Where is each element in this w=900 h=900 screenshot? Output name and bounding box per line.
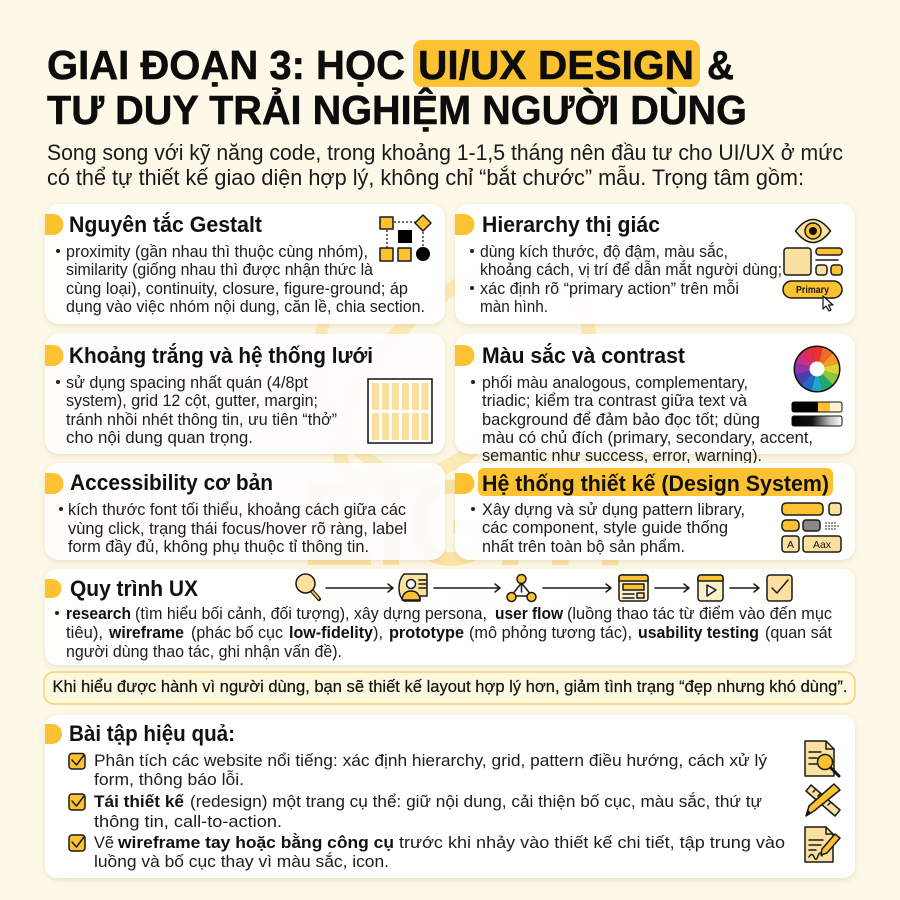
exercise 3: wireframe tay hoặc bằng công cụ (117, 833, 394, 852)
icon: colour wheel and contrast bars (792, 346, 842, 426)
icon: component library (782, 503, 841, 552)
exercise 3 (69, 833, 785, 871)
icon: ruler and pencil (806, 784, 840, 816)
icon: component library: A (787, 539, 794, 551)
body text: dụng vào việc nhóm nội dung, căn lề, chia section. (66, 298, 425, 316)
panel: Khoảng trắng và hệ thống lưới (45, 334, 445, 454)
watermark logo: EIGHT (300, 455, 645, 591)
subtitle: có thể tự thiết kế giao diện hợp lý, không chỉ “bắt chước” mẫu. Trọng tâm gồm: (47, 165, 804, 190)
body text: triadic; kiểm tra contrast giữa text và (482, 392, 748, 410)
body text: tránh nhồi nhét thông tin, ưu tiên “thở” (66, 411, 337, 429)
heading: Hierarchy thị giác (482, 212, 660, 237)
subtitle: Song song với kỹ năng code, trong khoảng 1-1,5 tháng nên đầu tư cho UI/UX ở mức (47, 140, 843, 165)
process flow icons (296, 574, 792, 602)
icon: wireframe (619, 575, 648, 601)
heading: Bài tập hiệu quả: (69, 721, 235, 746)
callout (44, 672, 855, 704)
panel: Bài tập hiệu quả (45, 715, 855, 878)
exercise 3: Vẽ (94, 833, 114, 852)
heading: Màu sắc và contrast (482, 343, 686, 368)
body text: (tìm hiểu bối cảnh, đối tượng), xây dựng persona, (135, 605, 487, 623)
body text (56, 374, 337, 447)
arrow (434, 584, 500, 592)
callout: Khi hiểu được hành vì người dùng, bạn sẽ thiết kế layout hợp lý hơn, giảm tình trạng “đẹp nhưng khó dùng”. (52, 677, 848, 696)
body text: cùng loại), continuity, closure, figure-ground; áp (66, 280, 408, 298)
exercise 1: form, thông báo lỗi. (94, 770, 244, 789)
arrow (730, 584, 759, 592)
body text: low-fidelity (289, 624, 374, 642)
title highlight (413, 40, 700, 87)
panel: Màu sắc và contrast (455, 334, 855, 465)
title: GIAI ĐOẠN 3: HỌC (47, 42, 405, 88)
heading: Accessibility cơ bản (70, 470, 273, 495)
body text: background để đảm bảo đọc tốt; dùng (482, 411, 760, 429)
body text: user flow (495, 605, 563, 623)
panel: Hệ thống thiết kế (455, 463, 855, 560)
exercise 3: luồng và bố cục thay vì màu sắc, icon. (94, 852, 389, 871)
body text: vùng click, trạng thái focus/hover rõ ràng, label (68, 520, 407, 538)
heading highlight (478, 468, 833, 496)
icon: eye and layout: Primary (796, 285, 829, 296)
icon: eye and layout (783, 220, 842, 311)
icon: document search (805, 741, 839, 776)
body text: system), grid 12 cột, gutter, margin; (66, 392, 318, 410)
body text: ), (373, 624, 383, 642)
body text (471, 501, 745, 556)
title: & (707, 42, 734, 88)
exercise 2 (69, 792, 762, 831)
body text: usability testing (638, 624, 759, 642)
panel: Accessibility cơ bản (45, 463, 445, 560)
body text: kích thước font tối thiểu, khoảng cách giữa các (68, 501, 406, 519)
body text: research (66, 605, 131, 623)
watermark logo (300, 267, 645, 620)
heading: Hệ thống thiết kế (Design System) (482, 471, 829, 496)
title: UI/UX DESIGN (418, 42, 694, 88)
subtitle (47, 140, 843, 190)
panel: Quy trình UX (45, 569, 855, 665)
body text: form đầy đủ, không phụ thuộc tỉ thông tin. (68, 538, 369, 556)
body text: (phác bố cục (191, 624, 283, 642)
watermark logo: Nhanh - Chuẩn - Đẹp (325, 582, 625, 620)
body text: semantic như success, error, warning). (482, 447, 762, 465)
heading: Khoảng trắng và hệ thống lưới (69, 343, 373, 368)
arrow (326, 584, 393, 592)
body text (471, 374, 813, 465)
icon: document with pencil (805, 827, 840, 862)
heading: Quy trình UX (70, 576, 198, 601)
body text: similarity (giống nhau thì được nhận thức là (66, 261, 374, 279)
body text: cho nội dung quan trọng. (66, 429, 253, 447)
panel: Nguyên tắc Gestalt (45, 204, 445, 324)
icon: prototype (698, 575, 723, 601)
body text (470, 242, 782, 316)
icon: persona (399, 574, 427, 601)
body text: prototype (389, 624, 464, 642)
body text: (luồng thao tác từ điểm vào đến mục (567, 605, 832, 623)
title: TƯ DUY TRẢI NGHIỆM NGƯỜI DÙNG (47, 87, 747, 133)
body text: xác định rõ “primary action” trên mỗi (480, 279, 739, 298)
arrow (543, 584, 611, 592)
body text: dùng kích thước, độ đậm, màu sắc, (480, 242, 728, 261)
body text (59, 501, 407, 556)
body text: nhất trên toàn bộ sản phẩm. (482, 538, 685, 556)
body text: (mô phỏng tương tác), (469, 624, 632, 642)
icon: usability check (767, 575, 792, 601)
body text (56, 243, 425, 316)
exercise 2: Tái thiết kế (94, 792, 185, 811)
exercise 1: Phân tích các website nổi tiếng: xác định hierarchy, grid, pattern điều hướng, cách xử lý (94, 751, 767, 770)
icon: component library: Aax (813, 539, 832, 551)
body text: màn hình. (480, 298, 548, 316)
icon: user flow (507, 574, 536, 602)
body text: (quan sát (765, 624, 832, 642)
heading: Nguyên tắc Gestalt (69, 212, 263, 237)
icon: 12-column grid (368, 379, 432, 443)
body text (55, 605, 832, 661)
body text: màu có chủ đích (primary, secondary, accent, (482, 429, 813, 447)
panel: Hierarchy thị giác (455, 204, 855, 324)
body text: người dùng thao tác, ghi nhận vấn đề). (66, 643, 342, 661)
body text: Xây dựng và sử dụng pattern library, (482, 501, 745, 519)
icon: gestalt shapes (380, 215, 431, 261)
exercise 2: thông tin, call-to-action. (94, 812, 282, 831)
arrow (655, 584, 689, 592)
body text: proximity (gần nhau thì thuộc cùng nhóm), (66, 243, 368, 261)
exercise 3: trước khi nhảy vào thiết kế chi tiết, tập trung vào (399, 833, 785, 852)
body text: khoảng cách, vị trí để dẫn mắt người dùng; (480, 260, 782, 279)
body text: sử dụng spacing nhất quán (4/8pt (66, 374, 308, 392)
body text: wireframe (108, 624, 184, 642)
exercise 1 (69, 751, 767, 789)
body text: tiêu), (66, 624, 103, 642)
body text: các component, style guide thống (482, 519, 728, 537)
icon: research (296, 574, 319, 599)
exercise 2: (redesign) một trang cụ thể: giữ nội dung, cải thiện bố cục, màu sắc, thứ tự (190, 792, 762, 811)
body text: phối màu analogous, complementary, (482, 374, 748, 392)
title (47, 40, 747, 133)
